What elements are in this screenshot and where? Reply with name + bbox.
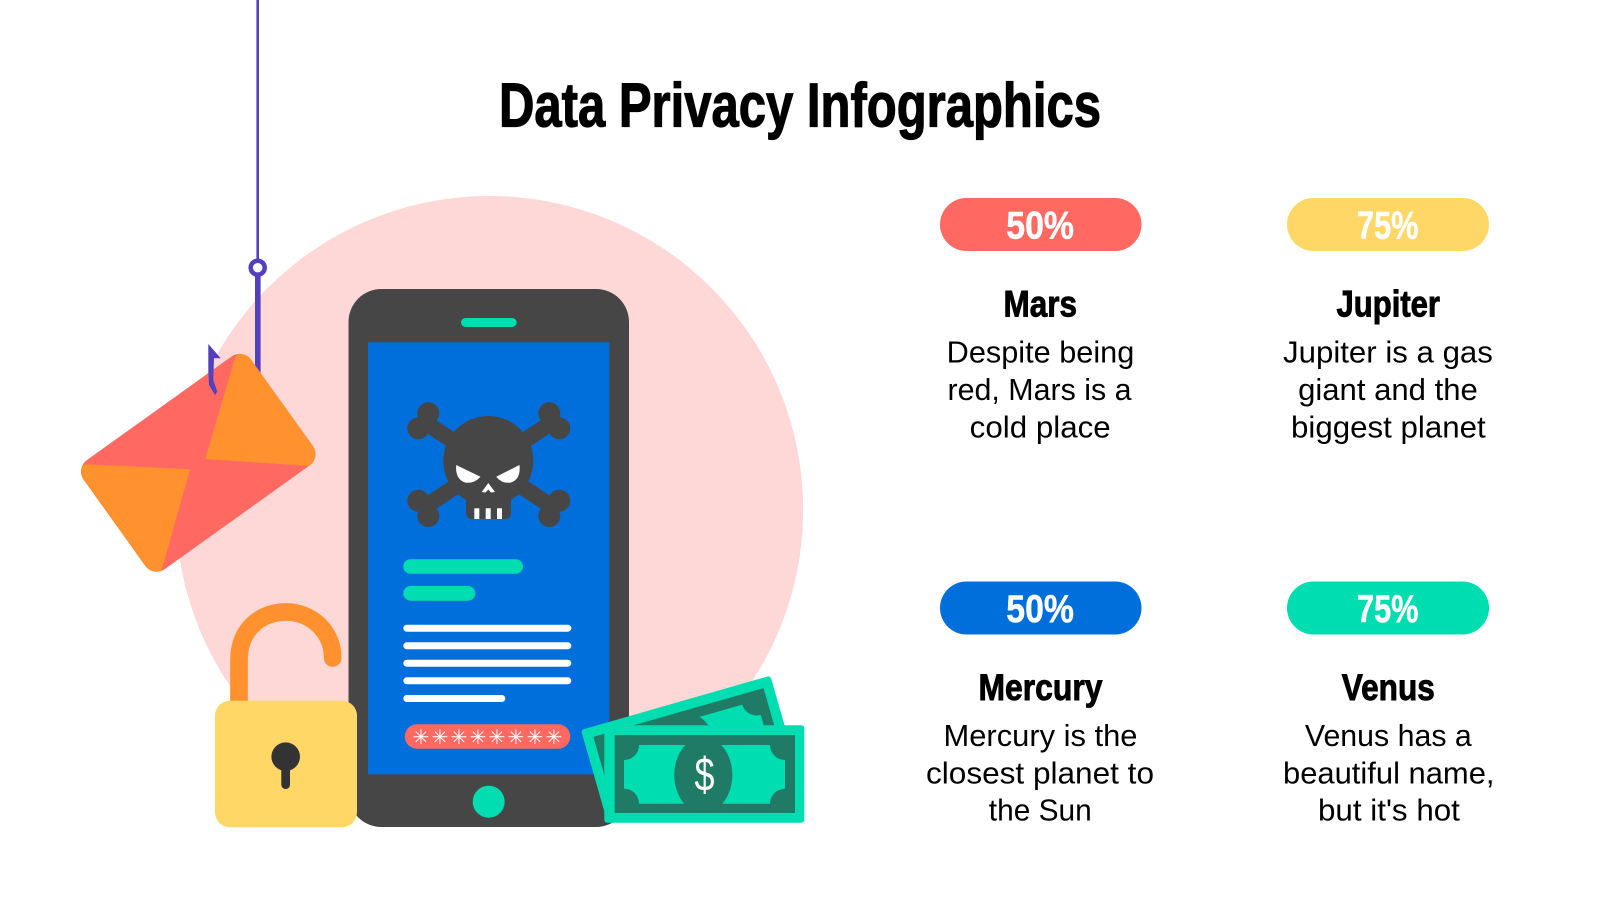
Venus description: but it's hot (1318, 794, 1460, 828)
screen heading bars (403, 559, 523, 601)
panel: Mercury (926, 582, 1154, 828)
home button (473, 786, 505, 818)
Mars percent pill: 50% (1006, 204, 1074, 248)
Mercury description (926, 719, 1154, 828)
background circle (176, 196, 803, 823)
panel: Mars (940, 198, 1142, 444)
Mars description: red, Mars is a (948, 373, 1132, 407)
icon: skull and crossbones (407, 402, 570, 527)
Mars description: cold place (970, 410, 1111, 444)
screen text lines (403, 625, 571, 702)
title: Data Privacy Infographics (499, 72, 1101, 140)
phone (348, 289, 629, 827)
Venus description (1283, 719, 1494, 828)
front bill (604, 725, 804, 823)
icon: fishing line and hook shank (251, 0, 265, 376)
Venus heading: Venus (1342, 667, 1435, 708)
Jupiter heading: Jupiter (1336, 284, 1440, 324)
Jupiter description: Jupiter is a gas (1283, 336, 1493, 370)
Venus percent pill: 75% (1357, 588, 1418, 631)
phone speaker (461, 318, 517, 327)
Mercury description: closest planet to (926, 756, 1154, 790)
Mars heading: Mars (1004, 284, 1077, 324)
Mars percent pill (940, 198, 1142, 251)
Jupiter percent pill (1287, 198, 1489, 251)
Mercury description: Mercury is the (944, 719, 1138, 753)
Jupiter description: biggest planet (1291, 410, 1486, 444)
icon: open padlock (215, 612, 357, 827)
Jupiter description: giant and the (1298, 373, 1478, 407)
back bill (581, 676, 797, 823)
phone screen (368, 342, 609, 774)
icon: hook barb (208, 344, 221, 395)
panel: Jupiter (1283, 198, 1493, 444)
Mercury description: the Sun (989, 794, 1092, 828)
panel: Venus (1283, 582, 1494, 828)
icon: envelope (81, 354, 316, 572)
Venus description: Venus has a (1305, 719, 1472, 753)
illustration: phishing phone scene (60, 0, 804, 827)
Mercury heading: Mercury (978, 667, 1103, 708)
icon: money bills (581, 676, 804, 823)
Mercury percent pill: 50% (1006, 588, 1074, 631)
Mercury percent pill (940, 582, 1142, 634)
password field: ✳✳✳✳✳✳✳✳ (413, 725, 562, 749)
Venus percent pill (1287, 582, 1489, 634)
Jupiter percent pill: 75% (1357, 204, 1418, 248)
front bill: $ (694, 748, 714, 800)
Mars description (947, 336, 1134, 444)
Venus description: beautiful name, (1283, 756, 1494, 790)
Jupiter description (1283, 336, 1493, 444)
Mars description: Despite being (947, 336, 1134, 370)
